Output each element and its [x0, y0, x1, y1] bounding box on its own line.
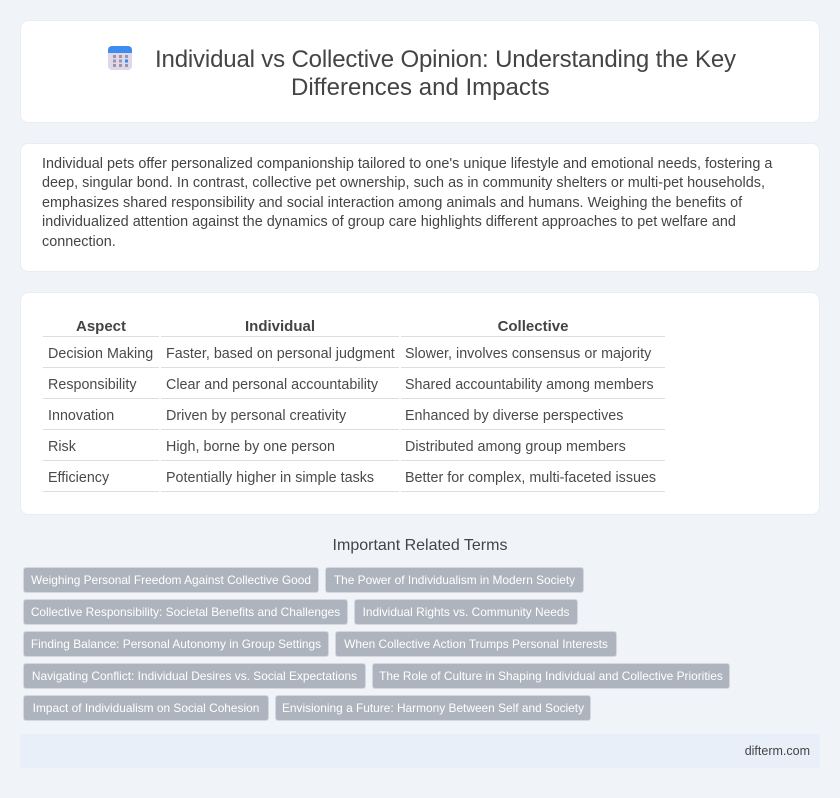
table: individual vs collective comparison: Better for complex, multi-faceted issues: [405, 470, 656, 486]
table: individual vs collective comparison: Faster, based on personal judgment: [166, 346, 395, 362]
text: introduction paragraph: connection.: [42, 234, 116, 250]
text: introduction paragraph: emphasizes shared responsibility and social interaction among animals and humans. Weighing the benefits of: [42, 195, 742, 211]
related term tags: Collective Responsibility: Societal Benefits and Challenges: [31, 605, 340, 619]
related term tags: When Collective Action Trumps Personal Interests: [344, 637, 608, 651]
table: individual vs collective comparison: Collective: [498, 318, 568, 335]
related term tags: Finding Balance: Personal Autonomy in Group Settings: [31, 637, 321, 651]
text: introduction paragraph: [42, 156, 772, 250]
icon: calendar: [108, 46, 132, 70]
table: individual vs collective comparison: Individual: [245, 318, 315, 335]
table: individual vs collective comparison: Shared accountability among members: [405, 377, 654, 393]
related term tags: Weighing Personal Freedom Against Collective Good: [31, 573, 311, 587]
table: individual vs collective comparison: Distributed among group members: [405, 439, 626, 455]
table: individual vs collective comparison: Slower, involves consensus or majority: [405, 346, 651, 362]
panel: header: [20, 20, 820, 123]
title: Differences and Impacts: [291, 74, 550, 101]
related term tags: Envisioning a Future: Harmony Between Self and Society: [282, 701, 584, 715]
table: individual vs collective comparison: Risk: [48, 439, 76, 455]
table: individual vs collective comparison: Efficiency: [48, 470, 109, 486]
text: introduction paragraph: deep, singular bond. In contrast, collective pet ownership, such as in community shelters or multi-pet households,: [42, 175, 765, 191]
related term tags: The Power of Individualism in Modern Society: [334, 573, 575, 587]
related term tags: The Role of Culture in Shaping Individual and Collective Priorities: [379, 669, 723, 683]
related term tags: Navigating Conflict: Individual Desires vs. Social Expectations: [32, 669, 357, 683]
table: individual vs collective comparison: Enhanced by diverse perspectives: [405, 408, 623, 424]
table: individual vs collective comparison: Potentially higher in simple tasks: [166, 470, 374, 486]
table: individual vs collective comparison: Aspect: [76, 318, 126, 335]
footer bar: [20, 734, 820, 768]
table: individual vs collective comparison: Responsibility: [48, 377, 136, 393]
table: individual vs collective comparison: High, borne by one person: [166, 439, 335, 455]
table: individual vs collective comparison: Innovation: [48, 408, 114, 424]
table: individual vs collective comparison: Driven by personal creativity: [166, 408, 346, 424]
related term tags: [23, 567, 730, 721]
panel: comparison table: [20, 292, 820, 515]
text: introduction paragraph: Individual pets offer personalized companionship tailored to one's unique lifestyle and emotional needs, fostering a: [42, 156, 772, 172]
text: introduction paragraph: individualized attention against the dynamics of group care highlights different approaches to pet welfare and: [42, 214, 736, 230]
related term tags: Individual Rights vs. Community Needs: [363, 605, 569, 619]
footer bar: difterm.com: [745, 744, 810, 758]
table: individual vs collective comparison: Decision Making: [48, 346, 153, 362]
title: Individual vs Collective Opinion: Understanding the Key: [155, 46, 736, 73]
table: individual vs collective comparison: [43, 318, 665, 492]
related term tags: Impact of Individualism on Social Cohesion: [33, 701, 259, 715]
table: individual vs collective comparison: Clear and personal accountability: [166, 377, 378, 393]
title: [155, 46, 736, 101]
panel: introduction: [20, 143, 820, 272]
heading: related terms: Important Related Terms: [333, 537, 507, 554]
